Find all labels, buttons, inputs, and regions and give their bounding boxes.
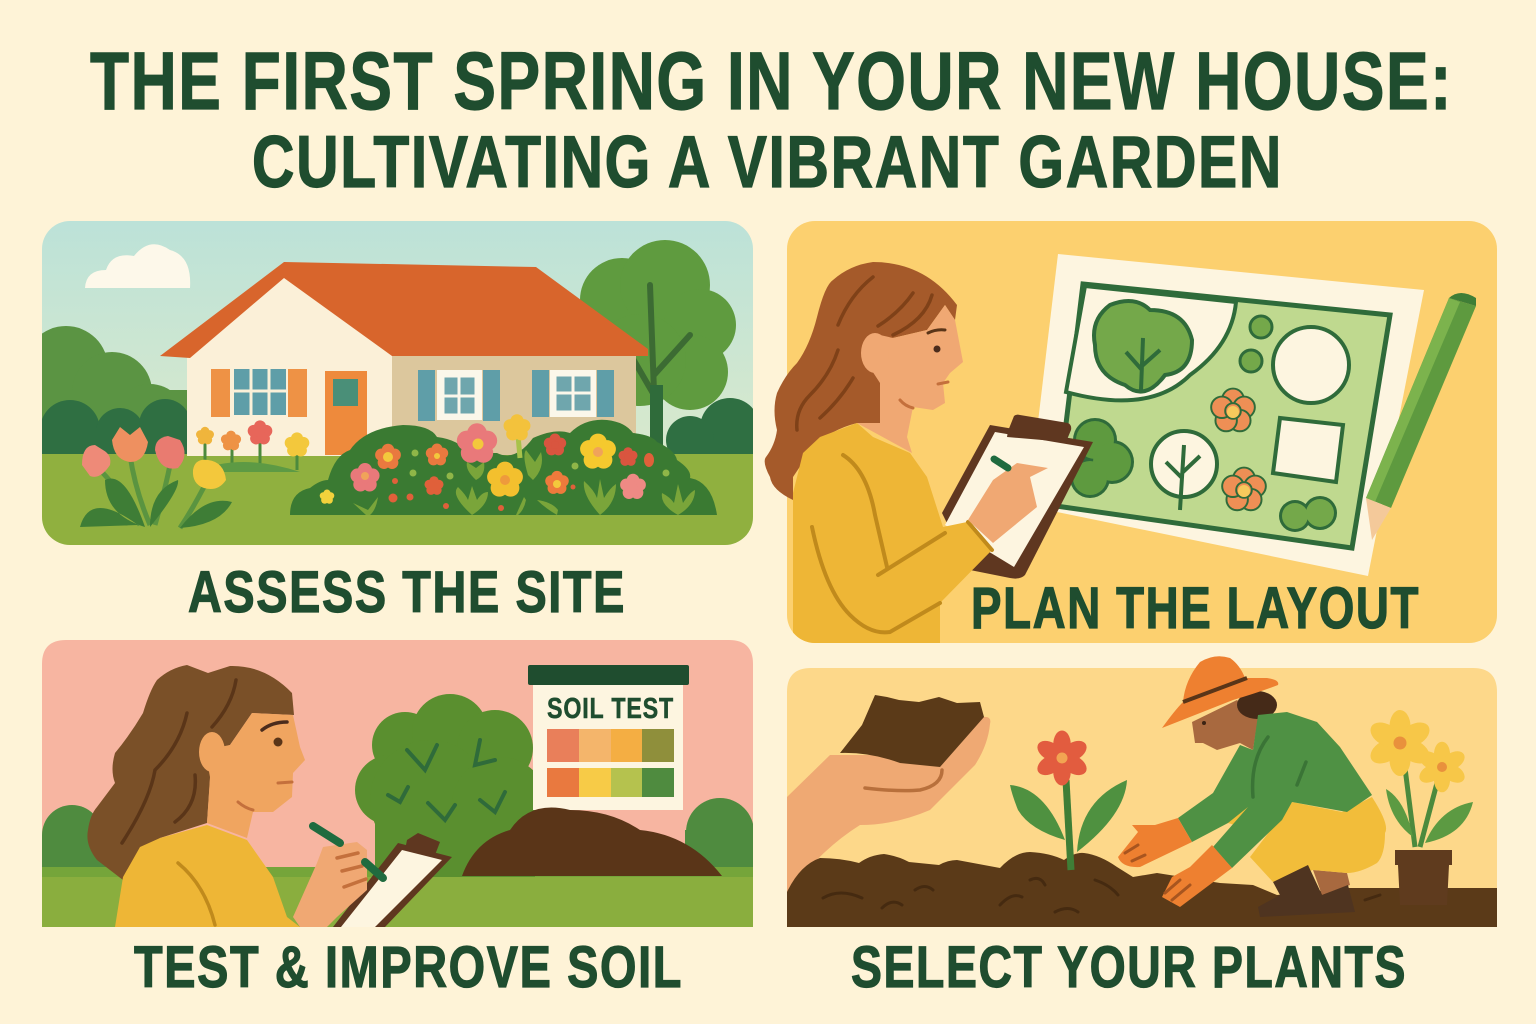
hair strands [122, 680, 236, 843]
eye and brow [928, 330, 945, 352]
eye, brow and mouth [238, 722, 292, 810]
soil test card [528, 665, 689, 810]
hair bun [1237, 691, 1277, 719]
ankle [1313, 870, 1350, 895]
boots [1258, 865, 1355, 917]
clipboard [942, 415, 1093, 579]
plan flower bottom [1222, 468, 1266, 510]
sweater fold [178, 863, 215, 925]
green sweater [1178, 712, 1372, 868]
yellow knee [1228, 800, 1252, 825]
flower bed [290, 414, 717, 515]
sun hat [1162, 656, 1278, 728]
small flowers at wall [195, 420, 309, 472]
window right [532, 370, 614, 417]
potted flower [1366, 710, 1473, 905]
plan white square [1273, 418, 1343, 482]
garden plan paper [1028, 254, 1424, 576]
sweater [793, 423, 992, 645]
big bush [355, 694, 548, 878]
plan small shrubs [1240, 316, 1272, 372]
neck and face [1192, 700, 1258, 750]
cream gable wall [187, 275, 392, 456]
tree [580, 240, 736, 450]
icon: cloud [85, 244, 190, 288]
mouth and chin [900, 382, 948, 408]
hair [765, 262, 957, 500]
label: plan the layout: PLAN THE LAYOUT [971, 576, 1420, 641]
background bushes left [42, 326, 187, 422]
title: CULTIVATING A VIBRANT GARDEN [252, 122, 1283, 203]
woman [765, 262, 1048, 645]
colour swatches [547, 729, 674, 797]
soil pile [462, 808, 722, 876]
window middle [418, 370, 500, 421]
panel: select your plants [787, 656, 1497, 927]
trousers [1250, 797, 1386, 882]
door [325, 371, 367, 455]
woman [87, 665, 452, 927]
house [160, 262, 648, 456]
hand [293, 842, 367, 927]
hair [87, 665, 294, 880]
face marks [1202, 721, 1206, 725]
dark bushes left [42, 399, 187, 454]
panel: assess the site [24, 221, 760, 549]
rear lawn [42, 867, 753, 877]
pen [994, 459, 1008, 468]
plan path [1066, 286, 1236, 400]
back bushes [42, 798, 753, 867]
soil marks [823, 878, 1380, 912]
bed flowers [320, 414, 670, 511]
neck and face [857, 305, 963, 453]
sweater folds [812, 455, 992, 632]
plan bush bottom right [1279, 496, 1337, 532]
panel background and scene [787, 668, 1497, 927]
hair strands [797, 277, 932, 430]
plan white circle [1273, 327, 1349, 403]
beige wing wall [385, 350, 636, 455]
tulips [80, 427, 232, 528]
sweater folds [1253, 737, 1306, 797]
dark bush right [666, 398, 753, 454]
plan tree [1094, 301, 1192, 392]
plan flower top [1211, 389, 1255, 431]
window left [211, 369, 307, 417]
label: assess the site: ASSESS THE SITE [188, 560, 626, 625]
finger lines [337, 853, 366, 887]
hand with soil [787, 695, 990, 895]
plan bush left [1070, 418, 1134, 498]
roof [160, 262, 648, 358]
gloves [1118, 818, 1232, 907]
panel background and plan [787, 221, 1497, 643]
glove marks [1125, 845, 1190, 900]
pen [313, 826, 383, 878]
ear [199, 732, 225, 772]
panel: test and improve soil [42, 640, 754, 927]
icon: pencil [1366, 293, 1476, 540]
title [90, 36, 1453, 203]
hand [968, 463, 1048, 543]
plan round tree [1151, 431, 1217, 510]
label: select your plants: SELECT YOUR PLANTS [851, 935, 1407, 1000]
soil ground [787, 852, 1497, 927]
front lawn [42, 877, 753, 927]
panel: plan the layout [765, 221, 1497, 645]
label: test and improve soil: TEST & IMPROVE SOIL [134, 935, 683, 1000]
red flower [1010, 730, 1127, 870]
lawn [42, 454, 753, 549]
neck and face [205, 713, 305, 838]
plan green area [1056, 284, 1390, 548]
gardener [1118, 656, 1386, 917]
sweater [115, 825, 300, 927]
bed leaves [353, 450, 695, 515]
soil test label: SOIL TEST [547, 693, 674, 725]
ear [861, 333, 889, 373]
clipboard [333, 833, 452, 927]
